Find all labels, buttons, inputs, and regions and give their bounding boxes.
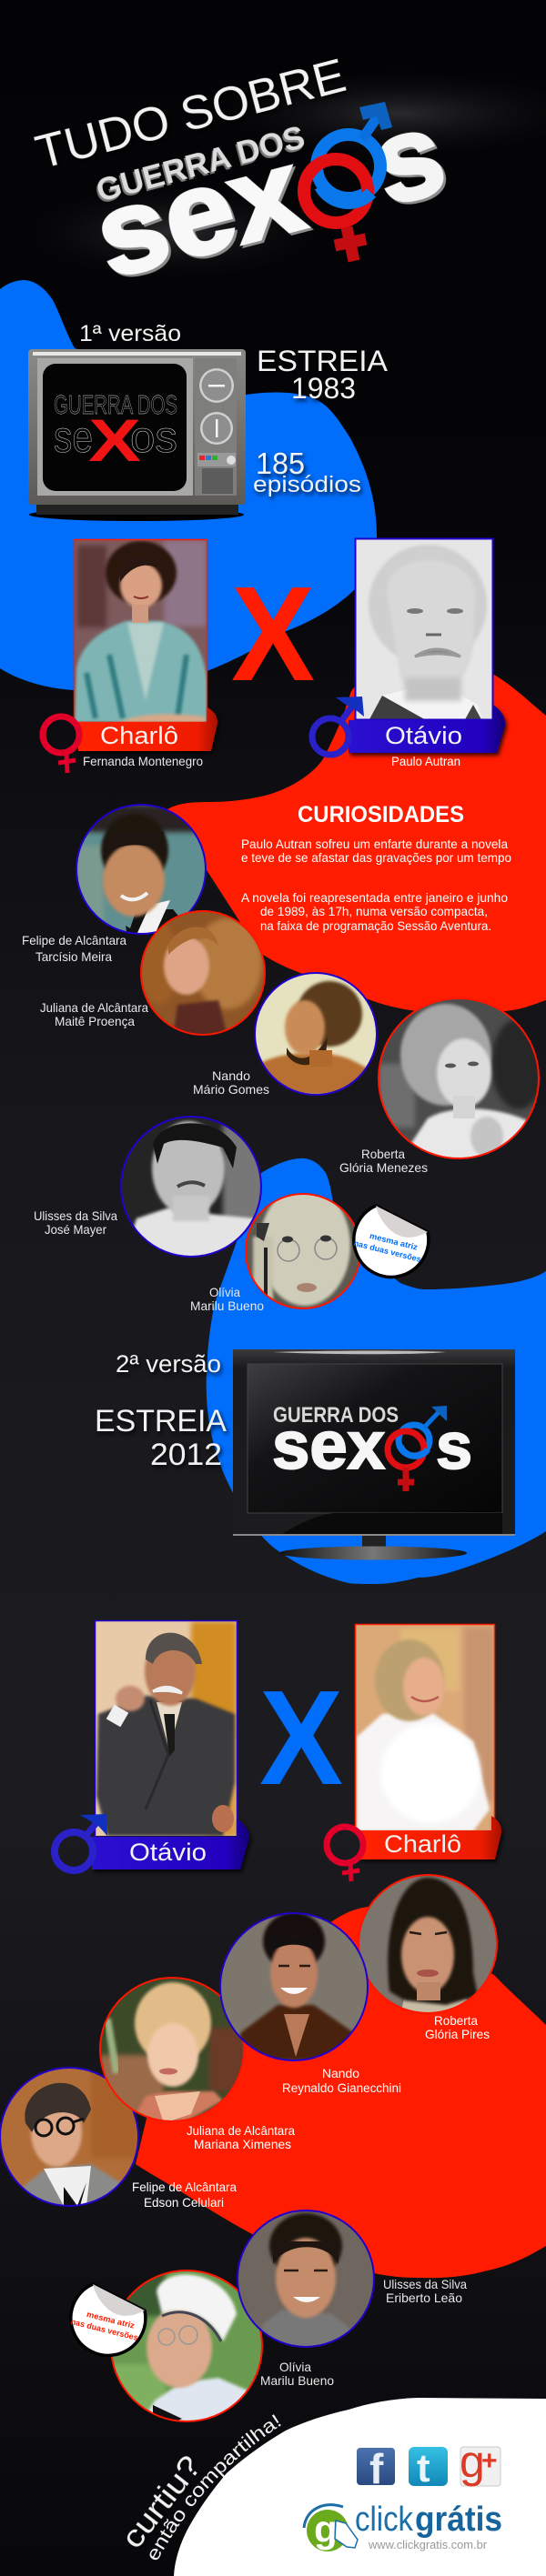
tv dial: top <box>199 368 234 403</box>
icon: twitter: t <box>417 2446 430 2491</box>
tv logo: sex <box>272 1408 385 1483</box>
text: 185 episodios: episódios <box>253 472 361 497</box>
sticker: same actress red <box>70 2284 146 2355</box>
letter X: red: X <box>231 559 315 709</box>
caption: Ulisses / Eriberto: Eriberto Leão <box>386 2290 462 2305</box>
caption: Olivia / Marilu <box>190 1285 264 1313</box>
tv logo: GUERRA DOS <box>273 1403 399 1428</box>
sticker: same actress blue <box>353 1206 429 1277</box>
icon: google plus <box>460 2436 500 2487</box>
banner: Charlo 2012 <box>327 1816 501 1881</box>
photo: Otavio 2012 <box>95 1620 237 1837</box>
banner name: Otávio <box>385 722 462 749</box>
icon: male symbol <box>312 697 364 755</box>
actor name: Fernanda Montenegro: Fernanda Montenegro <box>83 754 203 768</box>
icon: male symbol <box>55 1814 107 1870</box>
heading: tudo sobre: TUDO SOBRE <box>30 49 351 180</box>
logo mark <box>304 2505 358 2551</box>
logo: clickgratis: grátis <box>415 2501 502 2539</box>
red shape: curiosities <box>167 675 546 1011</box>
call to action: entao compartilha: então compartilha! <box>149 2414 281 2561</box>
sticker: same actress red: mesma atriz <box>86 2310 136 2330</box>
caption: Roberta / Gloria Pires: Roberta <box>434 2013 478 2028</box>
caption: Felipe / Tarcisio <box>22 933 126 964</box>
icon: facebook <box>357 2445 395 2492</box>
paragraph: second fact: na faixa de programação Sessão Aventura. <box>260 918 491 933</box>
logo word: final s: s <box>359 85 457 230</box>
tv screen logo: os <box>130 414 177 462</box>
paragraph: second fact: de 1989, às 17h, numa versão compacta, <box>260 904 488 918</box>
logo: clickgratis <box>304 2501 502 2551</box>
photo: Otavio 1983 <box>355 538 493 721</box>
banner name: Otávio <box>129 1839 207 1866</box>
text: estreia 2012 <box>95 1404 227 1472</box>
caption: Nando / Reynaldo: Nando <box>322 2066 359 2080</box>
tv screen logo: se <box>54 414 93 462</box>
blue shape: second version <box>207 1158 546 1584</box>
title <box>30 49 457 303</box>
photo: Mario Gomes <box>255 973 377 1095</box>
text: 185 episodios <box>253 446 361 497</box>
photo: Tarcisio Meira <box>76 805 206 937</box>
banner: Charlo 1983 <box>43 707 217 773</box>
red shape: second cast <box>136 1907 546 2278</box>
caption: Nando / Mario: Mário Gomes <box>193 1082 269 1097</box>
caption: Ulisses / Eriberto <box>383 2277 467 2305</box>
icon: old tv <box>28 349 246 521</box>
caption: Felipe / Edson: Felipe de Alcântara <box>132 2180 237 2194</box>
photo: Mariana Ximenes <box>100 1978 246 2123</box>
photo: Jose Mayer <box>121 1117 264 1259</box>
photo: Maite Proenca <box>139 911 265 1037</box>
caption: Olivia / Marilu 2012 <box>260 2360 334 2388</box>
tv logo <box>272 1403 472 1491</box>
logo url: www.clickgratis.com.br <box>368 2538 488 2551</box>
icon: twitter <box>409 2446 448 2491</box>
text block: curiosidades <box>241 802 511 933</box>
photo: Edson Celulari <box>0 2068 138 2206</box>
caption: Ulisses / Jose <box>34 1208 117 1237</box>
icon: male and female symbols <box>304 102 392 261</box>
caption: Ulisses / Jose: Ulisses da Silva <box>34 1208 117 1223</box>
letter X: blue: X <box>259 1663 343 1813</box>
photo: Charlo 1983 <box>75 540 207 723</box>
text: 185 episodios: 185 <box>256 446 305 480</box>
caption: Ulisses / Eriberto: Ulisses da Silva <box>383 2277 467 2291</box>
caption: Felipe / Tarcisio: Tarcísio Meira <box>35 949 112 964</box>
caption: Felipe / Tarcisio: Felipe de Alcântara <box>22 933 126 947</box>
icon: facebook: f <box>369 2445 384 2492</box>
heading: guerra dos: GUERRA DOS <box>93 119 308 209</box>
caption: Roberta / Gloria Pires: Glória Pires <box>425 2027 490 2041</box>
photo: Eriberto Leao <box>238 2210 374 2348</box>
tv buttons <box>197 453 236 466</box>
logo wordmark: click <box>355 2501 414 2539</box>
caption: Felipe / Edson: Edson Celulari <box>144 2195 224 2210</box>
photo: Marilu Bueno 2012 <box>111 2270 262 2423</box>
logo word: sex: sex <box>82 123 315 303</box>
icon: female symbol <box>327 1827 363 1881</box>
text: estreia 2012: ESTREIA <box>95 1404 227 1438</box>
white footer shape <box>174 2398 546 2576</box>
caption: Juliana / Mariana <box>187 2123 295 2151</box>
paragraph: first fact: e teve de se afastar das gravações por um tempo <box>241 850 511 865</box>
call to action: curtiu: curtiu? <box>115 2450 208 2555</box>
sticker: same actress blue: mesma atriz <box>369 1231 419 1252</box>
sticker: same actress red: nas duas versões <box>70 2317 139 2342</box>
caption: Olivia / Marilu: Olívia <box>209 1285 240 1299</box>
photo: Charlo 2012 <box>355 1624 495 1831</box>
actor name: Paulo Autran: Paulo Autran <box>391 754 460 768</box>
paragraph: second fact <box>241 890 508 933</box>
caption: Olivia / Marilu 2012: Marilu Bueno <box>260 2373 334 2388</box>
caption: Roberta / Gloria: Roberta <box>361 1147 405 1161</box>
photo: Gloria Pires <box>359 1875 497 2013</box>
caption: Juliana / Maite: Juliana de Alcântara <box>40 1000 148 1015</box>
caption: Felipe / Edson <box>132 2180 237 2210</box>
heading: 2a versao: 2ª versão <box>116 1350 221 1378</box>
sticker: same actress blue: nas duas versões <box>353 1238 422 1264</box>
caption: Juliana / Maite <box>40 1000 148 1028</box>
caption: Roberta / Gloria Pires <box>425 2013 490 2041</box>
caption: Juliana / Mariana: Mariana Ximenes <box>194 2137 291 2151</box>
tv dial: bottom <box>200 412 233 445</box>
banner: Otavio 2012 <box>55 1814 249 1870</box>
text: estreia 1983: 1983 <box>291 372 356 405</box>
tv screen logo: GUERRA DOS <box>54 391 177 420</box>
icon: google plus: g <box>460 2436 485 2487</box>
heading: 1a versao: 1ª versão <box>79 321 181 346</box>
paragraph: first fact <box>241 837 511 865</box>
caption: Roberta / Gloria: Glória Menezes <box>339 1160 428 1175</box>
photo: Marilu Bueno 1983 <box>246 1186 360 1308</box>
banner name: Charlô <box>100 722 178 749</box>
caption: Nando / Mario: Nando <box>212 1068 250 1083</box>
caption: Juliana / Mariana: Juliana de Alcântara <box>187 2123 295 2138</box>
tv logo: s <box>436 1410 472 1483</box>
tv screen logo: X <box>88 406 141 474</box>
blue shape: first version <box>0 280 377 690</box>
photo: Gloria Menezes <box>379 998 546 1159</box>
text: estreia 2012: 2012 <box>150 1438 222 1472</box>
photo: Reynaldo Gianecchini <box>220 1912 368 2060</box>
banner name: Charlô <box>384 1830 461 1858</box>
paragraph: first fact: Paulo Autran sofreu um enfarte durante a novela <box>241 837 508 851</box>
caption: Juliana / Maite: Maitê Proença <box>55 1014 135 1028</box>
caption: Nando / Mario <box>193 1068 269 1097</box>
caption: Olivia / Marilu 2012: Olívia <box>279 2360 311 2374</box>
caption: Ulisses / Jose: José Mayer <box>45 1222 106 1237</box>
heading: curiosidades: CURIOSIDADES <box>298 802 464 827</box>
icon: google plus: + <box>481 2446 498 2476</box>
caption: Roberta / Gloria <box>339 1147 428 1175</box>
tv speaker <box>202 468 233 494</box>
paragraph: second fact: A novela foi reapresentada entre janeiro e junho <box>241 890 508 905</box>
logo mark: g <box>314 2508 338 2551</box>
caption: Nando / Reynaldo: Reynaldo Gianecchini <box>282 2080 401 2095</box>
icon: flat screen tv <box>233 1349 515 1560</box>
caption: Nando / Reynaldo <box>282 2066 401 2095</box>
tv screen logo <box>54 391 177 474</box>
text: estreia 1983: ESTREIA <box>257 345 389 377</box>
caption: Olivia / Marilu: Marilu Bueno <box>190 1298 264 1313</box>
text: estreia 1983 <box>257 345 389 405</box>
banner: Otavio 1983 <box>312 697 505 755</box>
icon: female symbol <box>43 717 79 773</box>
